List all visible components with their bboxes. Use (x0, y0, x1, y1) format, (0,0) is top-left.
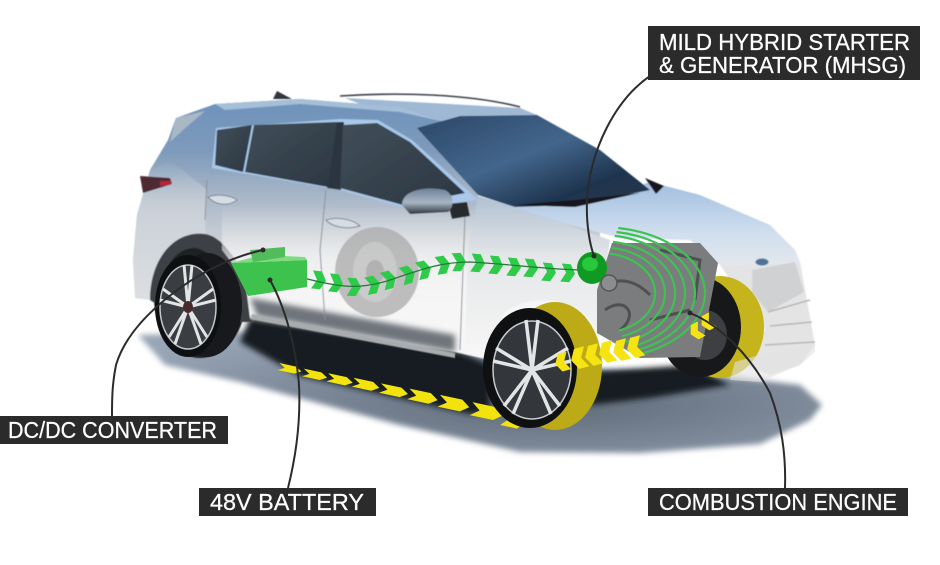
mirror (402, 189, 453, 214)
door lower shading (250, 298, 455, 352)
leader: combustion engine (690, 313, 785, 488)
hood (478, 182, 800, 265)
front door handle (326, 218, 360, 228)
underbody shadow (240, 318, 730, 414)
leader: DC/DC converter (112, 250, 263, 416)
side window frame (212, 119, 478, 208)
car (133, 91, 815, 375)
label: mild hybrid starter (648, 26, 920, 80)
leader lines (112, 76, 785, 488)
label: DC/DC converter: DC/DC CONVERTER (8, 417, 217, 443)
roof highlight (215, 99, 445, 122)
rear door handle (208, 195, 237, 204)
leader end dots (260, 248, 692, 316)
engine green arcs (610, 228, 705, 355)
floor yellow chevrons (278, 363, 526, 430)
label: combustion engine: COMBUSTION ENGINE (659, 489, 897, 515)
pillar between windows (327, 122, 344, 190)
leader: battery (270, 280, 299, 488)
car body (133, 99, 600, 360)
label: mild hybrid starter: MILD HYBRID STARTER (659, 29, 910, 55)
front bumper and grille (720, 262, 815, 375)
leader: MHSG (587, 76, 650, 256)
door lower haze (222, 205, 600, 360)
rear wheel (155, 253, 242, 357)
ghost spare wheel (335, 227, 419, 317)
rear corner panel (133, 160, 207, 300)
front bumper lower glass (730, 345, 815, 382)
rear door window (245, 122, 337, 187)
engine block (597, 243, 718, 358)
label: mild hybrid starter: & GENERATOR (MHSG) (659, 52, 906, 78)
48V battery block (231, 247, 307, 296)
front wheel (483, 302, 602, 430)
label: 48V battery: 48V BATTERY (210, 489, 364, 515)
mirror base (448, 202, 470, 219)
tail light (140, 176, 172, 193)
sill strip (250, 314, 455, 358)
antenna (273, 91, 292, 99)
rear wheel arch (150, 234, 252, 322)
green energy chevrons (311, 253, 576, 296)
far roof panel (345, 98, 537, 128)
roof rail (340, 94, 520, 107)
rear quarter window (215, 125, 252, 172)
badge (755, 258, 769, 266)
wiper (515, 193, 640, 207)
door seam (205, 180, 465, 350)
far front wheel (659, 276, 764, 378)
pulley (601, 275, 617, 291)
MHSG green unit (577, 252, 607, 284)
front fender (465, 196, 610, 345)
rear spoiler (170, 111, 205, 142)
energy flow centre line (296, 262, 585, 286)
yellow axle chevrons (553, 312, 717, 373)
windshield corner (645, 178, 664, 194)
engine detail (605, 250, 700, 330)
rear wheel well (154, 238, 246, 358)
windshield (417, 115, 650, 207)
front door window (340, 123, 465, 205)
ground shadow (138, 330, 822, 453)
